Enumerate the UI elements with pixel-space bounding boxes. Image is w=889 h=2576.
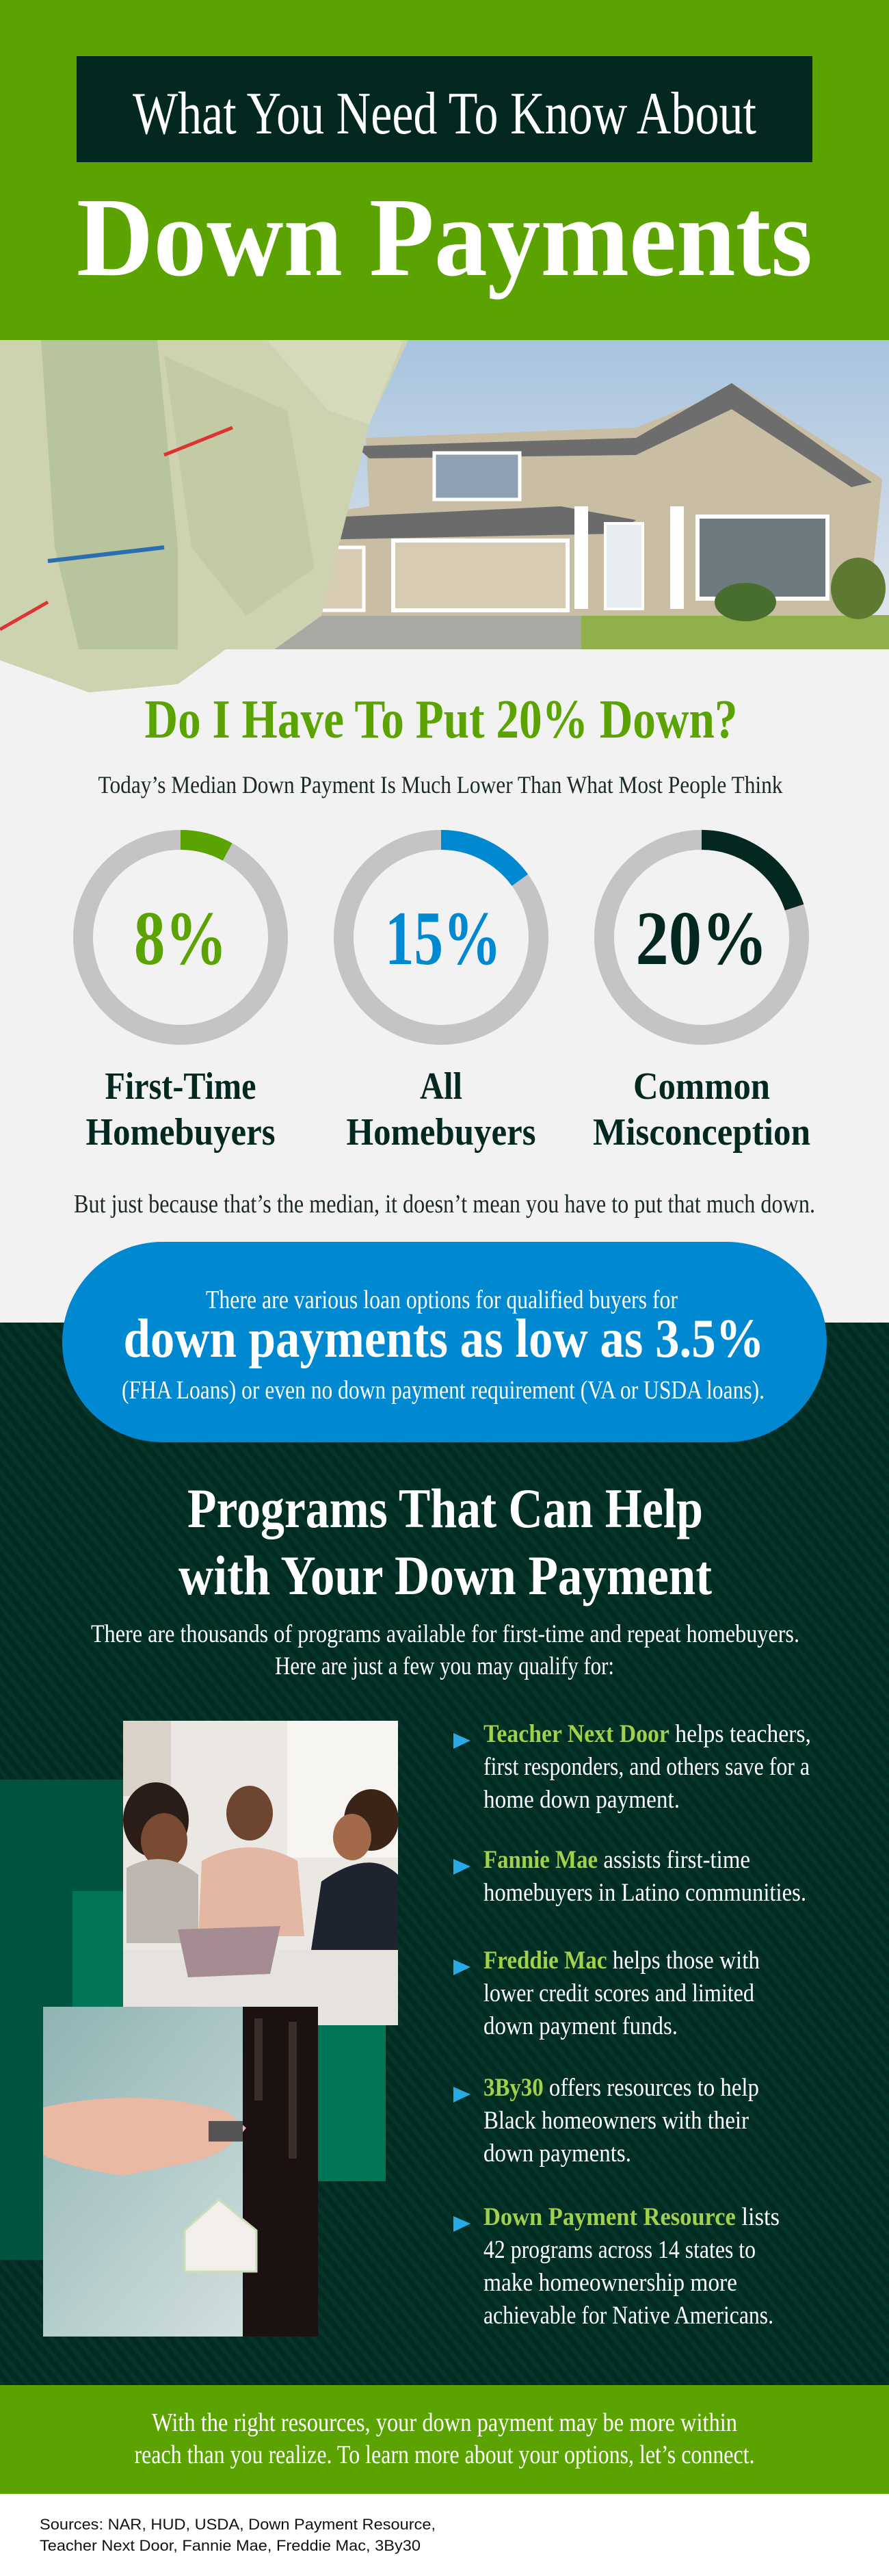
- bullet: Freddie Mac: lower credit scores and limited: [483, 1979, 754, 2007]
- donut: common misconception 20%: [593, 840, 810, 1154]
- programs heading: [178, 1477, 712, 1606]
- bullet: Fannie Mae: Fannie Mae assists first-time: [483, 1846, 750, 1874]
- donut: all homebuyers 15%: Homebuyers: [346, 1111, 536, 1154]
- bullet: Teacher Next Door: home down payment.: [483, 1786, 680, 1814]
- programs intro: There are thousands of programs available for first-time and repeat homebuyers.: [91, 1620, 799, 1648]
- bullet: Freddie Mac: down payment funds.: [483, 2012, 678, 2040]
- bullet: 3By30: Black homeowners with their: [483, 2107, 749, 2135]
- stats heading: Do I Have To Put 20% Down?: [145, 690, 737, 750]
- donut: all homebuyers 15%: [343, 840, 539, 1154]
- bullet: Teacher Next Door: Teacher Next Door helps teachers,: [483, 1720, 811, 1748]
- donut: common misconception 20%: Common: [633, 1065, 770, 1108]
- programs heading: Programs That Can Help: [187, 1477, 703, 1539]
- bullet: 3By30: 3By30 offers resources to help: [483, 2074, 759, 2102]
- programs heading: with Your Down Payment: [178, 1544, 712, 1606]
- dark section background: [0, 1323, 889, 2385]
- bullet: Down Payment Resource: achievable for Native Americans.: [483, 2302, 773, 2330]
- main title: Down Payments: [77, 174, 812, 300]
- header green background: [0, 0, 889, 340]
- bullet: Fannie Mae: homebuyers in Latino communities.: [483, 1879, 806, 1907]
- sources: [40, 2516, 436, 2554]
- bullet: Teacher Next Door: first responders, and others save for a: [483, 1753, 810, 1781]
- callout pill: (FHA Loans) or even no down payment requirement (VA or USDA loans).: [122, 1376, 765, 1405]
- bullet: Down Payment Resource: 42 programs across 14 states to: [483, 2236, 756, 2264]
- callout pill: [62, 1242, 827, 1442]
- donut: common misconception 20%: 20%: [636, 896, 767, 981]
- bullet: Freddie Mac: [453, 1947, 760, 2040]
- sources: Sources: NAR, HUD, USDA, Down Payment Resource,: [40, 2516, 436, 2533]
- hero photo: house and money: [0, 340, 889, 691]
- bullet: Teacher Next Door: [453, 1720, 811, 1814]
- donut: all homebuyers 15%: All: [420, 1065, 462, 1108]
- callout pill: down payments as low as 3.5%: [123, 1309, 765, 1369]
- bullet: Down Payment Resource: Down Payment Resource lists: [483, 2203, 780, 2231]
- callout pill: There are various loan options for qualified buyers for: [206, 1286, 678, 1314]
- donut: first-time homebuyers 8%: 8%: [134, 896, 227, 981]
- sources: Teacher Next Door, Fannie Mae, Freddie Mac, 3By30: [40, 2537, 421, 2554]
- donut: common misconception 20%: Misconception: [593, 1111, 810, 1154]
- photo: hand with key: [43, 2007, 318, 2337]
- stats subtitle: Today’s Median Down Payment Is Much Lower Than What Most People Think: [98, 771, 782, 798]
- bullet: Fannie Mae: [453, 1846, 806, 1907]
- money overflow: [0, 649, 226, 692]
- donut: first-time homebuyers 8%: [83, 840, 278, 1154]
- bullet: Down Payment Resource: [453, 2203, 780, 2330]
- bullet: 3By30: [453, 2074, 759, 2168]
- donut: all homebuyers 15%: 15%: [385, 896, 501, 981]
- donut: first-time homebuyers 8%: Homebuyers: [86, 1111, 275, 1154]
- bullet: Down Payment Resource: make homeownership more: [483, 2269, 737, 2297]
- title box: [77, 56, 812, 162]
- bullet: Freddie Mac: Freddie Mac helps those with: [483, 1947, 760, 1975]
- donut: first-time homebuyers 8%: First-Time: [105, 1065, 256, 1108]
- programs intro: [91, 1620, 799, 1680]
- bullet: 3By30: down payments.: [483, 2139, 631, 2168]
- closing green banner: With the right resources, your down payment may be more within: [152, 2408, 737, 2437]
- gray stats section background: [0, 649, 889, 1323]
- closing green banner: reach than you realize. To learn more about your options, let’s connect.: [134, 2441, 755, 2469]
- closing green banner: [0, 2385, 889, 2494]
- photo: people at table: [123, 1721, 399, 2025]
- programs intro: Here are just a few you may qualify for:: [275, 1652, 614, 1680]
- decorative teal blocks: [0, 1780, 123, 2260]
